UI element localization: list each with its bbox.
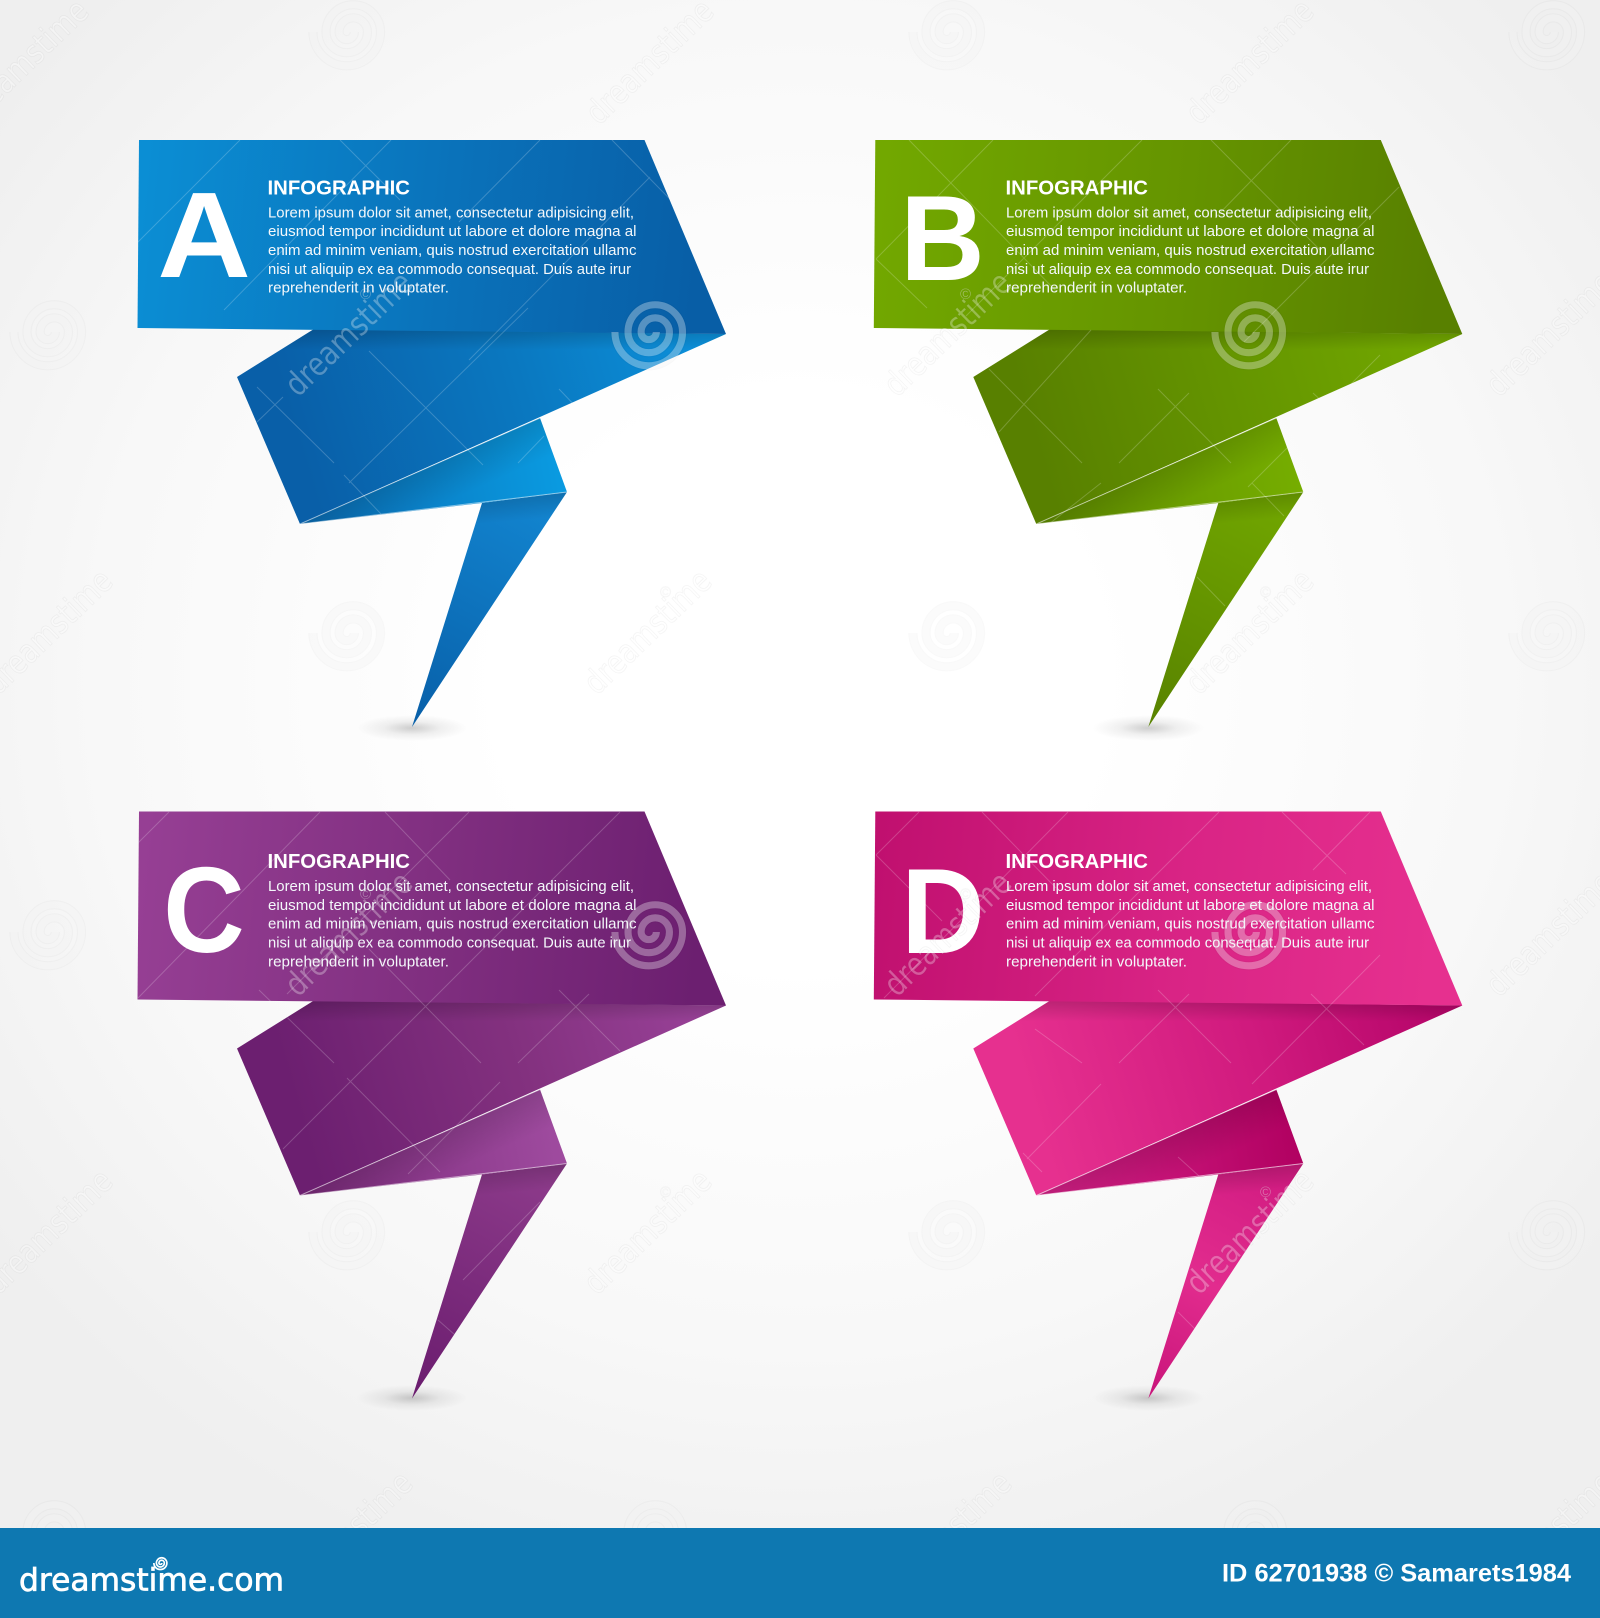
origami shape D: [874, 812, 1462, 1398]
watermark text: ©: [1260, 1184, 1271, 1201]
body text A: nisi ut aliquip ex ea commodo consequat. Duis aute irur: [268, 261, 631, 278]
origami shape B: [874, 140, 1462, 727]
body text C: enim ad minim veniam, quis nostrud exercitation ullamc: [268, 916, 637, 933]
floor shadow C: [356, 1385, 468, 1411]
footer bar: [0, 1528, 1600, 1618]
panel B: green origami banner: [874, 140, 1462, 741]
footer logo: dreamstime.com: [19, 1562, 284, 1598]
body text D: enim ad minim veniam, quis nostrud exercitation ullamc: [1006, 916, 1375, 933]
watermark text: dreamstime: [1177, 1161, 1321, 1302]
body text A: Lorem ipsum dolor sit amet, consectetur adipisicing elit,: [268, 204, 634, 221]
origami shape C: [138, 812, 726, 1398]
letter B: B: [900, 170, 985, 306]
heading A: INFOGRAPHIC: [268, 176, 410, 200]
watermark text: dreamstime: [875, 1463, 1019, 1604]
heading B: INFOGRAPHIC: [1006, 176, 1148, 200]
body text B: eiusmod tempor incididunt ut labore et dolore magna al: [1006, 223, 1374, 240]
watermark text: ©: [360, 886, 371, 903]
watermark text: ©: [660, 1184, 671, 1201]
watermark lines C: [138, 812, 620, 1335]
watermark text: ©: [960, 886, 971, 903]
watermark text: ©: [1260, 584, 1271, 601]
footer credit: ID 62701938 © Samarets1984: [1222, 1560, 1571, 1588]
heading D: INFOGRAPHIC: [1006, 850, 1148, 873]
watermark text: ©: [660, 584, 671, 601]
watermark text: dreamstime: [575, 1161, 719, 1302]
letter C: C: [163, 842, 245, 978]
watermark lines A: [138, 140, 708, 514]
icon: spiral: [154, 1558, 167, 1570]
watermark text: dreamstime: [1177, 561, 1321, 702]
watermark text: dreamstime: [875, 863, 1019, 1004]
body text A: eiusmod tempor incididunt ut labore et dolore magna al: [268, 223, 636, 240]
floor shadow B: [1092, 715, 1204, 741]
letter A: A: [157, 167, 251, 303]
body text B: enim ad minim veniam, quis nostrud exercitation ullamc: [1006, 242, 1375, 259]
body text B: [1006, 204, 1375, 297]
body text C: Lorem ipsum dolor sit amet, consectetur adipisicing elit,: [268, 878, 634, 895]
watermark text: dreamstime: [575, 561, 719, 702]
letter D: D: [901, 843, 985, 979]
watermark text: ©: [360, 286, 371, 303]
body text A: enim ad minim veniam, quis nostrud exercitation ullamc: [268, 242, 637, 259]
panel A: blue origami banner: [138, 140, 726, 741]
body text C: [268, 878, 637, 970]
body text C: nisi ut aliquip ex ea commodo consequat. Duis aute irur: [268, 934, 631, 952]
body text B: nisi ut aliquip ex ea commodo consequat. Duis aute irur: [1006, 261, 1369, 278]
body text B: Lorem ipsum dolor sit amet, consectetur adipisicing elit,: [1006, 204, 1372, 221]
body text D: Lorem ipsum dolor sit amet, consectetur adipisicing elit,: [1006, 878, 1372, 895]
floor shadow D: [1092, 1385, 1204, 1411]
body text D: eiusmod tempor incididunt ut labore et dolore magna al: [1006, 897, 1374, 914]
body text D: reprehenderit in voluptater.: [1006, 953, 1187, 970]
watermark text: dreamstime: [276, 863, 420, 1004]
watermark text: dreamstime: [276, 263, 420, 404]
body text D: [1006, 878, 1375, 970]
panel D: pink origami banner: [874, 812, 1462, 1411]
watermark text: dreamstime: [276, 1463, 420, 1604]
watermark lines D: [876, 812, 1380, 1329]
body text C: eiusmod tempor incididunt ut labore et dolore magna al: [268, 897, 636, 914]
body text B: reprehenderit in voluptater.: [1006, 280, 1187, 297]
heading C: INFOGRAPHIC: [268, 850, 410, 873]
watermark text: ©: [960, 286, 971, 303]
body text A: reprehenderit in voluptater.: [268, 280, 449, 297]
floor shadow A: [356, 715, 468, 741]
origami shape A: [138, 140, 726, 727]
watermark text: dreamstime: [875, 263, 1019, 404]
watermark lines B: [876, 140, 1399, 606]
panel C: purple origami banner: [138, 812, 726, 1411]
body text D: nisi ut aliquip ex ea commodo consequat. Duis aute irur: [1006, 934, 1369, 952]
body text C: reprehenderit in voluptater.: [268, 953, 449, 970]
body text A: [268, 204, 637, 297]
